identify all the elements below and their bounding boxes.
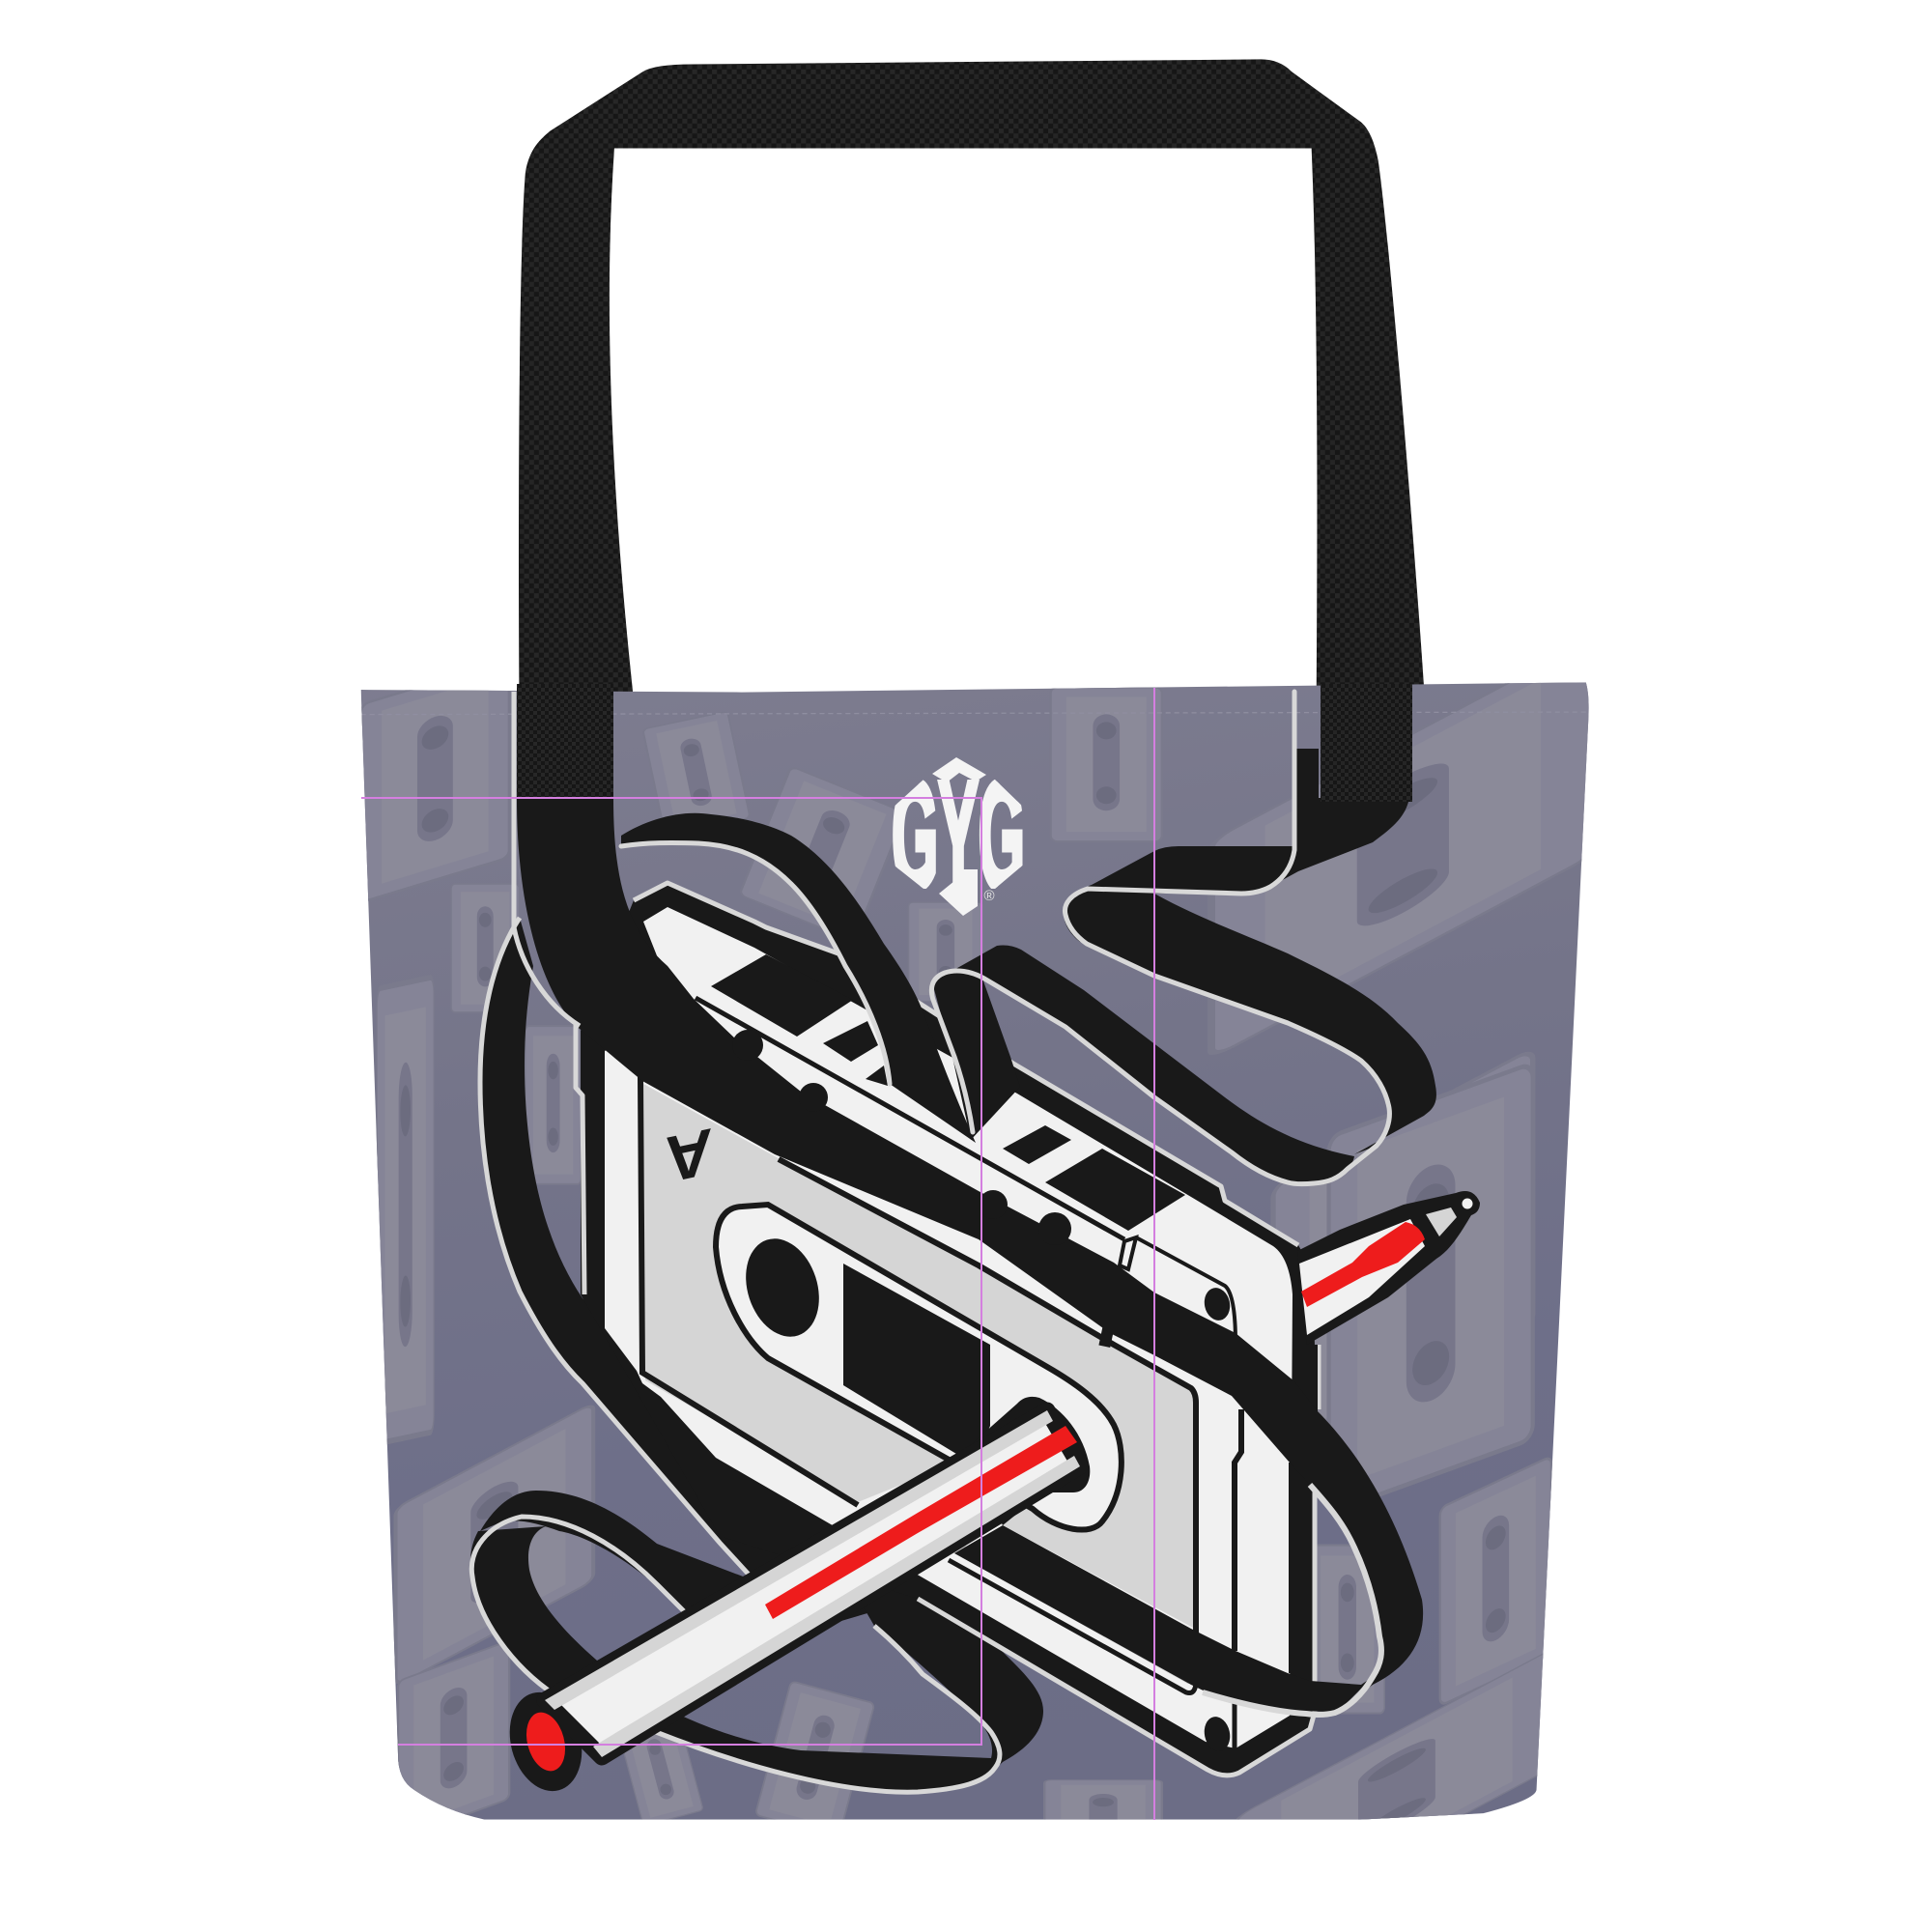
- main tape band over cassette: [514, 692, 1423, 1715]
- cassette side letter: A: [665, 1114, 713, 1198]
- magenta guide lines: [361, 688, 1154, 1820]
- tape ribbon: top arch: [621, 813, 976, 1143]
- pen end cap: [521, 1708, 571, 1776]
- tote bag product illustration: [361, 59, 1589, 1820]
- ribbon upper fold: [1064, 749, 1436, 1154]
- cassette lines: [640, 998, 1306, 1750]
- tape ribbon: left arc: [480, 918, 966, 1633]
- strap patches stitched on bag: [517, 684, 1412, 802]
- pen: [499, 1191, 1480, 1800]
- brand logo: ®: [983, 888, 995, 904]
- cassette spindle socket: [966, 1397, 1090, 1525]
- band edge highlight: [1203, 1485, 1381, 1715]
- band body upper: [517, 798, 1423, 1700]
- cassette central panel: [716, 1205, 1122, 1530]
- band body lower: [954, 1525, 1373, 1712]
- tape ribbon: right S curl: [931, 692, 1436, 1184]
- pen body: [545, 1410, 1080, 1757]
- cassette white body: [605, 907, 1293, 1748]
- pen end shell: [499, 1684, 592, 1800]
- cassette: [576, 883, 1319, 1776]
- bag body with faint cassette pattern: [361, 682, 1589, 1820]
- strap handles: [519, 59, 1424, 693]
- cassette halo edge: [576, 883, 1319, 1776]
- cassette reel hole: [734, 1229, 831, 1347]
- pen red stripe: [765, 1426, 1077, 1619]
- cassette silhouette: [581, 883, 1315, 1776]
- ribbon tongue: [932, 970, 1020, 1140]
- cassette windows: [711, 954, 1233, 1753]
- cassette tape window: [843, 1264, 990, 1454]
- cassette lower grey strip: [949, 1548, 1196, 1692]
- ribbon outline: [931, 692, 1389, 1184]
- tape ribbon: lower right lobe: [639, 1584, 1043, 1792]
- band notches: [732, 1030, 1071, 1245]
- ribbon lower fold: [951, 945, 1354, 1184]
- tape ribbon: lower left lobe: [470, 1491, 773, 1695]
- brand logo: [893, 757, 1022, 916]
- tote bag product illustration: GYG: [892, 749, 1025, 922]
- pen rear tip: [1297, 1191, 1480, 1345]
- cassette grey face: [643, 1084, 1195, 1629]
